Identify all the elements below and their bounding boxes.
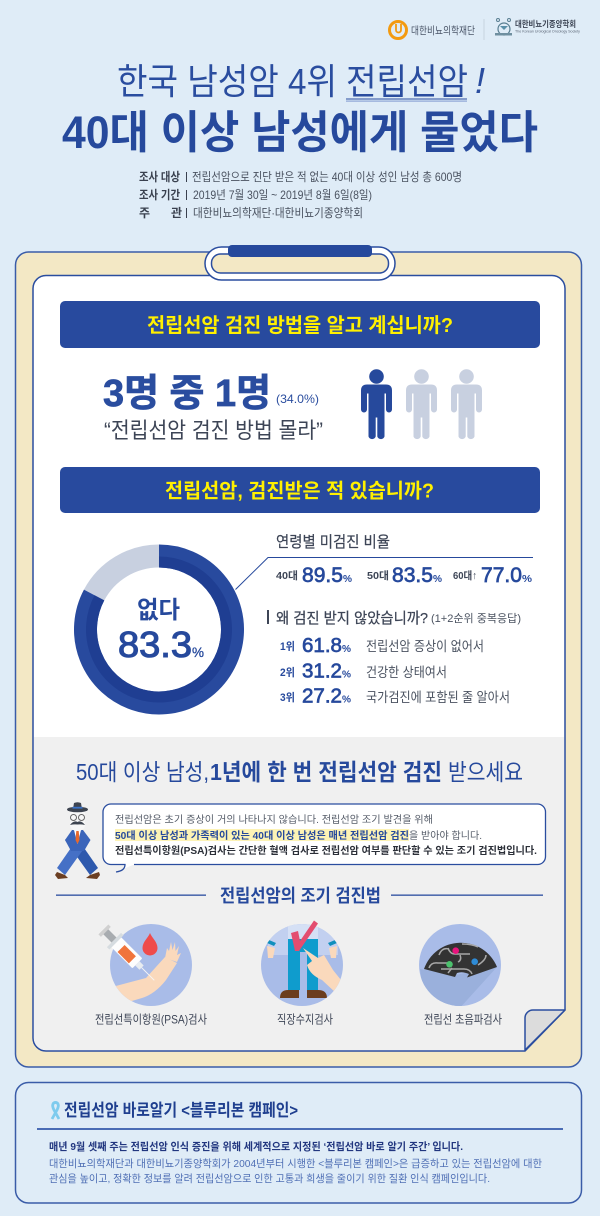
logos <box>390 18 580 40</box>
survey info: 관 <box>171 206 182 220</box>
stat: one in three: “전립선암 검진 방법 몰라” <box>104 418 323 443</box>
title: 40대 이상 남성에게 물었다 <box>62 107 538 158</box>
reason 2: 2위 <box>280 666 295 679</box>
campaign panel: 대한비뇨의학재단과 대한비뇨기종양학회가 2004년부터 시행한 <블루리본 캠페인>은 급증하고 있는 전립선암에 대한 <box>49 1157 542 1170</box>
title: 전립선암 <box>346 61 468 102</box>
age non-screening rates: % <box>343 573 353 585</box>
section heading: 1년에 한 번 전립선암 검진 <box>210 759 442 785</box>
logo: society <box>495 18 580 36</box>
grey section <box>34 737 564 1050</box>
campaign panel: 전립선암 바로알기 <블루리본 캠페인> <box>64 1100 298 1120</box>
reason 3: 국가검진에 포함된 줄 알아서 <box>366 690 510 705</box>
age non-screening rates: % <box>522 573 533 585</box>
donut chart: % <box>192 644 204 660</box>
age non-screening rates: % <box>433 573 443 585</box>
donut chart: 83.3 <box>118 624 192 665</box>
reason 1: % <box>342 643 352 655</box>
reason 3: 27.2 <box>302 686 342 708</box>
section heading <box>76 759 523 785</box>
paper <box>33 276 565 1051</box>
stat: one in three: 3명 중 1명 <box>103 373 271 415</box>
reason 3: % <box>342 694 352 706</box>
logo: society: The Korean Urological Oncology Society <box>515 30 580 34</box>
donut chart: 없다 <box>137 597 180 624</box>
age non-screening rates: 40대 <box>276 569 298 582</box>
banner: screening method: 전립선암 검진 방법을 알고 계십니까? <box>147 314 453 337</box>
person grey <box>406 369 437 439</box>
reason 2: 건강한 상태여서 <box>366 665 447 680</box>
reason 1: 61.8 <box>302 635 342 657</box>
stat: one in three <box>103 373 323 443</box>
reason 3: 3위 <box>280 691 295 704</box>
logo: society: 대한비뇨기종양학회 <box>515 19 576 29</box>
test labels: 전립선 초음파검사 <box>424 1012 502 1026</box>
clipboard board <box>16 252 582 1067</box>
logo: foundation: 대한비뇨의학재단 <box>411 25 475 37</box>
reason 1: 전립선암 증상이 없어서 <box>366 639 484 654</box>
test labels: 전립선특이항원(PSA)검사 <box>95 1012 207 1026</box>
banner: screened before <box>60 467 540 513</box>
early screening heading: 전립선암의 조기 검진법 <box>220 886 381 906</box>
icon: digital rectal exam <box>261 920 345 1006</box>
reasons: (1+2순위 중복응답) <box>431 612 521 625</box>
survey info: 대한비뇨의학재단·대한비뇨기종양학회 <box>193 206 363 220</box>
reason 3 <box>280 686 510 708</box>
banner: screening method <box>60 301 540 348</box>
donut chart <box>85 556 232 703</box>
speech bubble: 50대 이상 남성과 가족력이 있는 40대 이상 남성은 매년 전립선암 검진 <box>115 829 409 842</box>
survey info: 조사 대상 <box>139 170 180 184</box>
person grey <box>451 369 482 439</box>
reasons: 왜 검진 받지 않았습니까? <box>276 610 428 627</box>
campaign panel: 매년 9월 셋째 주는 전립선암 인식 증진을 위해 세계적으로 지정된 ‘전립선암 바로 알기 주간’ 입니다. <box>49 1140 463 1153</box>
survey info: 2019년 7월 30일 ~ 2019년 8월 6일(8일) <box>193 188 372 202</box>
mascot <box>55 802 100 879</box>
age non-screening rates: 연령별 미검진 비율 <box>276 533 390 551</box>
stat: one in three: (34.0%) <box>276 392 319 406</box>
icon: PSA blood test <box>96 922 192 1006</box>
banner: screened before: 전립선암, 검진받은 적 있습니까? <box>165 480 434 502</box>
speech bubble: 전립선특이항원(PSA)검사는 간단한 혈액 검사로 전립선암 여부를 판단할 수 있는 조기 검진법입니다. <box>115 844 537 857</box>
survey info: 전립선암으로 진단 받은 적 없는 40대 이상 성인 남성 총 600명 <box>192 170 462 184</box>
paper fold <box>525 1010 565 1050</box>
reason 2: 31.2 <box>302 660 342 682</box>
speech bubble: 을 받아야 합니다. <box>409 830 482 842</box>
survey info: 조사 기간 <box>139 187 180 202</box>
title: ! <box>475 60 485 101</box>
age non-screening rates: 60대↑ <box>453 569 477 582</box>
speech bubble: 전립선암은 초기 증상이 거의 나타나지 않습니다. 전립선암 조기 발견을 위해 <box>115 813 433 826</box>
section heading: 50대 이상 남성, <box>76 759 209 785</box>
campaign panel: 관심을 높이고, 정확한 정보를 알려 전립선암으로 인한 고통과 희생을 줄이기 위한 질환 인식 캠페인입니다. <box>49 1172 490 1185</box>
clip <box>205 245 395 280</box>
section heading: 받으세요 <box>448 759 523 785</box>
reason 2: % <box>342 668 352 680</box>
reason 1 <box>280 635 484 657</box>
reason 1: 1위 <box>280 640 295 653</box>
title <box>62 60 538 158</box>
reasons <box>267 610 521 708</box>
leader line <box>236 558 533 590</box>
survey info <box>139 170 462 220</box>
icon: blue ribbon <box>52 1102 59 1119</box>
campaign panel <box>16 1082 582 1203</box>
speech bubble <box>103 804 546 872</box>
logo: foundation <box>390 22 475 38</box>
age non-screening rates: 83.5 <box>392 563 433 587</box>
survey info: 주 <box>139 206 150 220</box>
icon: ultrasound <box>419 924 501 1010</box>
age non-screening rates: 50대 <box>367 569 389 582</box>
reason 2 <box>280 660 447 682</box>
test labels: 직장수지검사 <box>277 1012 333 1026</box>
age non-screening rates <box>276 533 533 587</box>
age non-screening rates: 77.0 <box>481 563 522 587</box>
test labels <box>95 1012 502 1026</box>
age non-screening rates: 89.5 <box>302 563 343 587</box>
title: 한국 남성암 4위 <box>117 61 337 102</box>
person highlighted <box>361 369 392 439</box>
icon: people <box>361 369 482 439</box>
